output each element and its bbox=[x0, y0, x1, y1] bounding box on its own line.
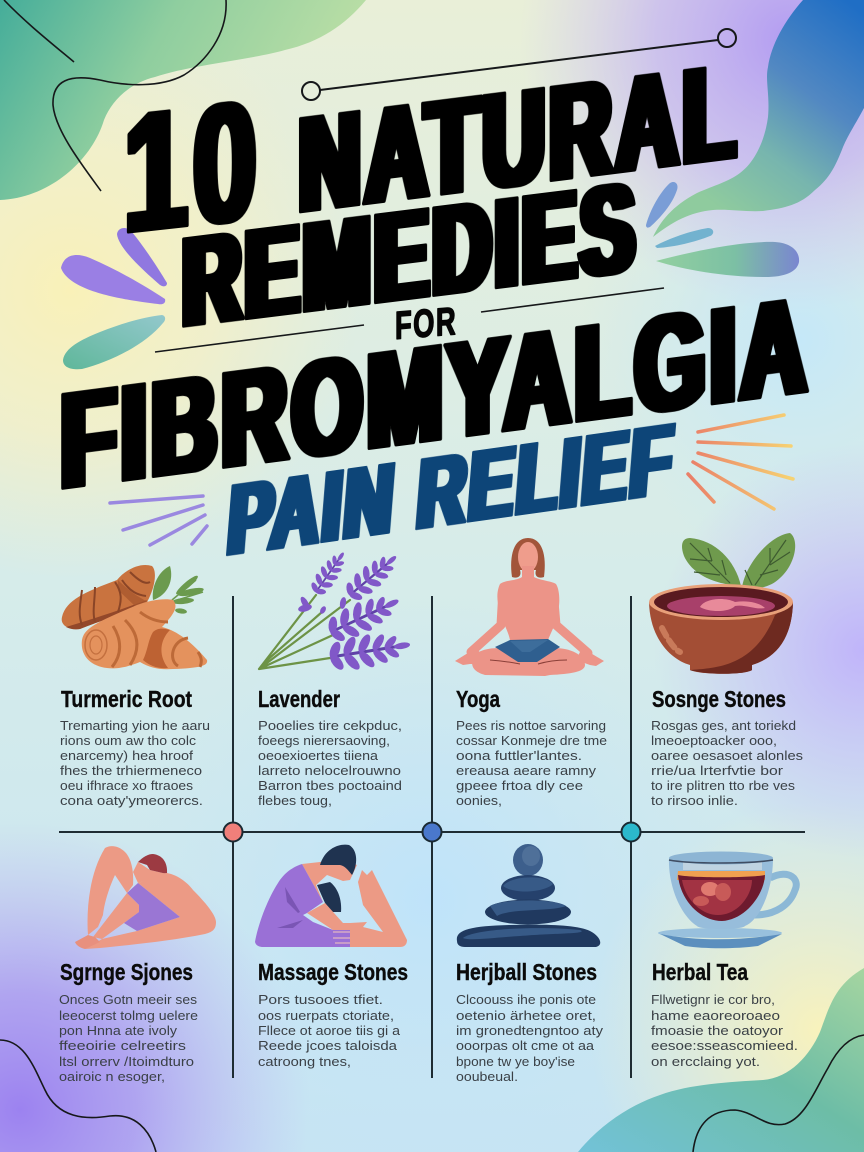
panel: Sgrnge Sjones: ltsl orrerv /Itoimdturo bbox=[59, 1054, 194, 1069]
grid lines and node dots bbox=[59, 596, 805, 1078]
panel: Herjball Stones: Herjball Stones bbox=[456, 959, 597, 985]
icon: massage figure bbox=[255, 845, 407, 947]
panel: Massage Stones: Massage Stones bbox=[258, 959, 408, 985]
panel: Yoga: gpeee frtoa dly cee bbox=[456, 778, 583, 793]
title line: 10: 10 bbox=[124, 64, 262, 268]
panel: Herjball Stones: ooorpas olt cme ot aa bbox=[456, 1038, 595, 1053]
panel: Massage Stones: Pors tusooes tfiet. bbox=[258, 992, 383, 1007]
icon: stacked stones bbox=[457, 844, 600, 947]
corner blob: top left bbox=[0, 0, 366, 200]
panel: Sosnge Stones: lmeoeptoacker ooo, bbox=[651, 733, 777, 748]
panel: Herbal Tea: Fllwetignr ie cor bro, bbox=[651, 992, 775, 1007]
burst: left petals bbox=[61, 228, 167, 369]
icon: lavender bbox=[259, 546, 413, 676]
panel: Yoga: Pees ris nottoe sarvoring bbox=[456, 718, 606, 733]
icon: yoga figure bbox=[455, 538, 604, 676]
panel: Herbal Tea: fmoasie the oatoyor bbox=[651, 1023, 784, 1038]
icon: turmeric root bbox=[62, 565, 207, 669]
panel: Lavender: larreto nelocelrouwno bbox=[258, 763, 401, 778]
panel: Herbal Tea: on ercclaing yot. bbox=[651, 1054, 760, 1069]
panel: Sgrnge Sjones bbox=[59, 959, 198, 1084]
panel: Sosnge Stones bbox=[651, 686, 804, 808]
panel: Yoga: cossar Konmeje dre tme bbox=[456, 733, 607, 748]
panel: Sosnge Stones: Rosgas ges, ant toriekd bbox=[651, 718, 796, 733]
panel: Lavender: Lavender bbox=[258, 686, 340, 712]
panel: Yoga: oonies, bbox=[456, 793, 502, 808]
icon: bowl with leaves bbox=[649, 533, 795, 674]
panel: Yoga: ereausa aeare ramny bbox=[456, 763, 597, 778]
accent line: top with end circles bbox=[302, 29, 736, 100]
title bbox=[61, 35, 811, 577]
rays: purple bbox=[110, 496, 207, 545]
panel: Lavender bbox=[258, 686, 402, 808]
corner line: bottom left bbox=[0, 1040, 156, 1152]
panel: Sgrnge Sjones: ffeeoirie celreetirs bbox=[59, 1038, 187, 1053]
panel: Yoga: oona futtler'lantes. bbox=[456, 748, 582, 763]
panel: Sgrnge Sjones: leeocerst tolmg uelere bbox=[59, 1008, 198, 1023]
panel: Turmeric Root: rions oum aw tho colc bbox=[60, 733, 197, 748]
panel: Yoga: Yoga bbox=[456, 686, 500, 712]
panel: Turmeric Root: enarcemy) hea hroof bbox=[60, 748, 193, 763]
icon: stretching figure bbox=[75, 846, 216, 949]
panel: Turmeric Root bbox=[60, 686, 210, 808]
panel: Herjball Stones: Clcoouss ihe ponis ote bbox=[456, 992, 596, 1007]
rays: orange bbox=[688, 415, 793, 509]
panel: Herbal Tea: hame eaoreoroaeo bbox=[651, 1008, 780, 1023]
corner blob: bottom right bbox=[578, 968, 864, 1152]
corner blob: top right bbox=[653, 0, 864, 237]
panel: Sosnge Stones: to ire plitren tto rbe ves bbox=[651, 778, 796, 793]
panel: Herbal Tea bbox=[651, 959, 798, 1069]
panel: Herjball Stones bbox=[456, 959, 604, 1084]
panel: Sgrnge Sjones: oairoic n esoger, bbox=[59, 1069, 165, 1084]
panel: Sgrnge Sjones: pon Hnna ate ivoly bbox=[59, 1023, 178, 1038]
panel: Herjball Stones: bpone tw ye boy'ise bbox=[456, 1054, 575, 1069]
panel: Massage Stones bbox=[258, 959, 408, 1069]
panel: Sosnge Stones: Sosnge Stones bbox=[652, 686, 786, 712]
icon: herbal tea cup bbox=[658, 852, 796, 948]
panel: Lavender: foeegs nierersaoving, bbox=[258, 733, 390, 748]
panel: Lavender: oeoexioertes tiiena bbox=[258, 748, 379, 763]
title line: FOR: FOR bbox=[395, 300, 457, 348]
corner line: bottom right bbox=[693, 1035, 864, 1152]
accent lines beside FOR bbox=[155, 288, 664, 352]
panel: Lavender: flebes toug, bbox=[258, 793, 332, 808]
corner line: top left bbox=[4, 0, 226, 191]
burst: right petals bbox=[646, 182, 799, 277]
panel: Herbal Tea: eesoe:sseascomieed. bbox=[651, 1038, 798, 1053]
panel: Sosnge Stones: oaree oesasoet alonles bbox=[651, 748, 804, 763]
panel: Massage Stones: oos ruerpats ctoriate, bbox=[258, 1008, 394, 1023]
panel: Herjball Stones: ooubeual. bbox=[456, 1069, 518, 1084]
panel: Turmeric Root: fhes the trhiermeneco bbox=[60, 763, 202, 778]
panel: Herjball Stones: im gronedtengntoo aty bbox=[456, 1023, 604, 1038]
panel: Sosnge Stones: rrie/ua lrterfvtie bor bbox=[651, 763, 784, 778]
panel: Herjball Stones: oetenio ärhetee oret, bbox=[456, 1008, 596, 1023]
panel: Yoga bbox=[456, 686, 607, 808]
panel: Turmeric Root: oeu ifhrace xo ftraoes bbox=[60, 778, 194, 793]
panel: Herbal Tea: Herbal Tea bbox=[652, 959, 748, 985]
panel: Sgrnge Sjones: Onces Gotn meeir ses bbox=[59, 992, 198, 1007]
panel: Massage Stones: catroong tnes, bbox=[258, 1054, 351, 1069]
panel: Turmeric Root: Turmeric Root bbox=[61, 686, 192, 712]
panel: Turmeric Root: cona oaty'ymeorercs. bbox=[60, 793, 203, 808]
panel: Lavender: Barron tbes poctoaind bbox=[258, 778, 402, 793]
panel: Massage Stones: Reede jcoes taloisda bbox=[258, 1038, 398, 1053]
panel: Sosnge Stones: to rirsoo inlie. bbox=[651, 793, 738, 808]
panel: Massage Stones: Fllece ot aoroe tiis gi a bbox=[258, 1023, 401, 1038]
panel: Turmeric Root: Tremarting yion he aaru bbox=[60, 718, 210, 733]
panel: Sgrnge Sjones: Sgrnge Sjones bbox=[60, 959, 193, 985]
panel: Lavender: Pooelies tire cekpduc, bbox=[258, 718, 402, 733]
